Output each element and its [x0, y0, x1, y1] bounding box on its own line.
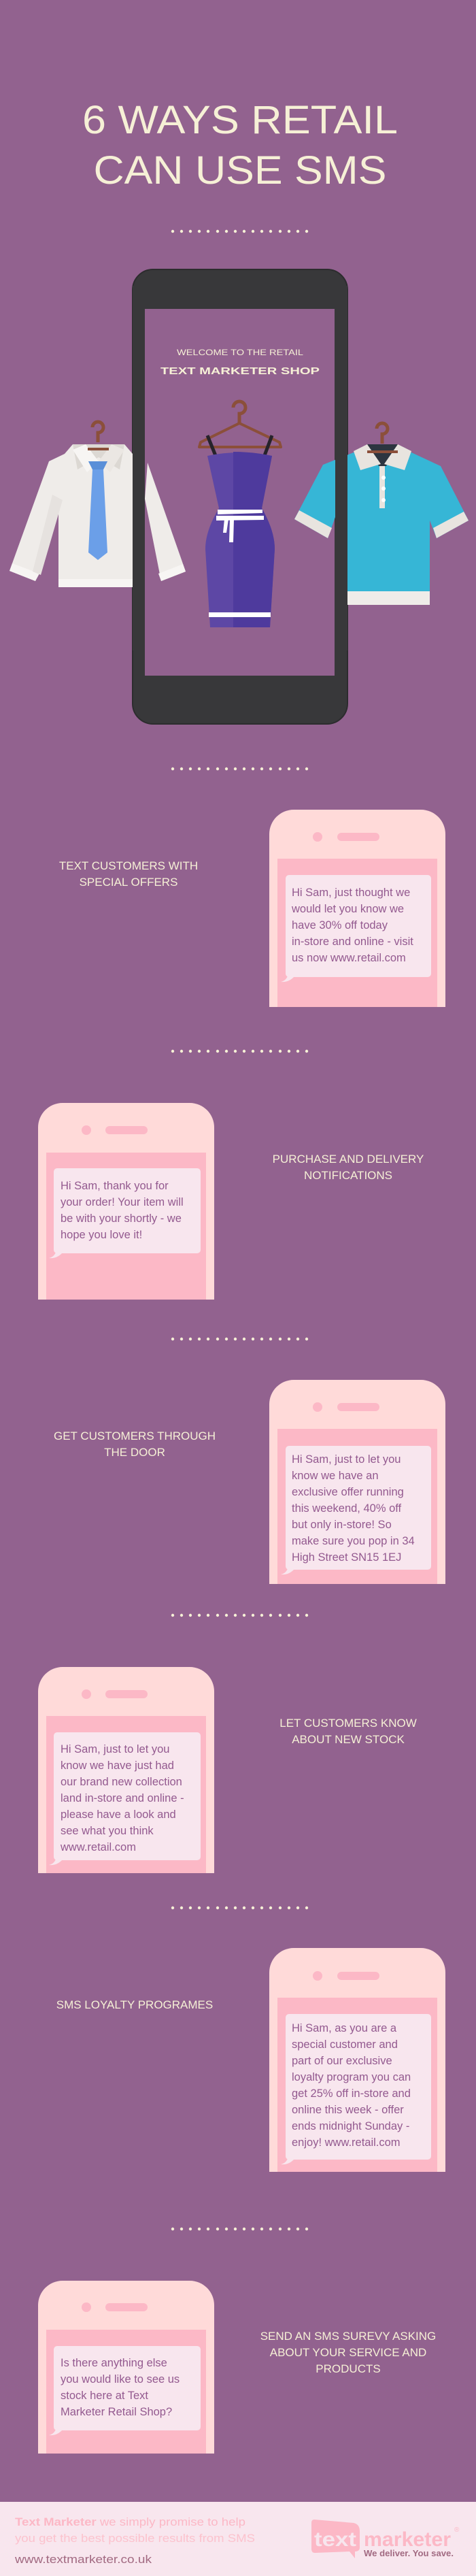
phone: survey sms: Marketer Retail Shop? — [61, 2406, 172, 2418]
phone: in-store offer sms — [269, 1380, 445, 1584]
phone: special offer sms: would let you know we — [291, 903, 404, 915]
phone: new collection sms: www.retail.com — [60, 1841, 136, 1853]
heading: send an sms survey: SEND AN SMS SUREVY ASKING — [260, 2330, 436, 2343]
hero: phone with clothes — [10, 269, 469, 724]
phone: loyalty sms: special customer and — [292, 2038, 398, 2051]
heading: purchase and delivery notifications: PURCHASE AND DELIVERY — [273, 1153, 424, 1166]
icon: white shirt with tie — [10, 286, 186, 650]
logo: text marketer: ® — [454, 2526, 460, 2534]
heading: let customers know about new stock: ABOUT NEW STOCK — [292, 1733, 405, 1746]
phone: order sms: your order! Your item will — [61, 1196, 184, 1208]
phone: in-store offer sms: make sure you pop in 34 — [292, 1535, 415, 1547]
phone: survey sms: Is there anything else — [61, 2357, 167, 2369]
phone: in-store offer sms: Hi Sam, just to let you — [292, 1453, 401, 1466]
phone: order sms: be with your shortly - we — [61, 1212, 182, 1225]
phone: new collection sms: know we have just had — [61, 1760, 174, 1772]
section 2: purchase notifications — [38, 1103, 424, 1300]
section 6: survey — [38, 2281, 436, 2454]
logo: text marketer: text — [314, 2528, 356, 2551]
footer — [0, 2502, 476, 2576]
heading: text customers with special offers: SPECIAL OFFERS — [80, 876, 177, 889]
phone: new collection sms: Hi Sam, just to let you — [61, 1743, 169, 1755]
phone: in-store offer sms: exclusive offer running — [292, 1486, 404, 1498]
logo: text marketer: We deliver. You save. — [364, 2548, 454, 2558]
phone: in-store offer sms: this weekend, 40% off — [292, 1502, 402, 1515]
shop welcome text — [160, 348, 320, 377]
section 5: loyalty — [56, 1948, 445, 2172]
heading: send an sms survey: ABOUT YOUR SERVICE AND — [270, 2346, 426, 2359]
phone: in-store offer sms: know we have an — [292, 1470, 378, 1482]
logo: text marketer: marketer — [364, 2528, 451, 2551]
title — [82, 98, 398, 193]
phone: loyalty sms: part of our exclusive — [292, 2055, 392, 2067]
footer text: you get the best possible results from SMS — [15, 2532, 255, 2545]
title: CAN USE SMS — [94, 148, 386, 193]
phone device — [133, 269, 347, 724]
phone: loyalty sms: get 25% off in-store and — [292, 2087, 411, 2100]
footer text — [14, 2515, 255, 2566]
logo: text marketer — [311, 2520, 460, 2558]
phone: special offer sms: Hi Sam, just thought we — [292, 887, 410, 899]
heading: get customers through the door — [54, 1430, 216, 1459]
phone: special offer sms: in-store and online - visit — [292, 936, 413, 948]
phone: loyalty sms: online this week - offer — [292, 2104, 404, 2116]
section 4: new stock — [38, 1667, 417, 1873]
phone: new collection sms: please have a look and — [61, 1809, 176, 1821]
phone: in-store offer sms: High Street SN15 1EJ — [292, 1551, 401, 1564]
icon: purple dress on hanger — [199, 401, 281, 627]
title: 6 WAYS RETAIL — [82, 98, 398, 142]
heading: get customers through the door: GET CUSTOMERS THROUGH — [54, 1430, 216, 1442]
phone: new collection sms: our brand new collection — [61, 1776, 182, 1788]
section 3: through the door — [54, 1380, 445, 1584]
phone: loyalty sms — [269, 1948, 445, 2172]
heading: let customers know about new stock: LET CUSTOMERS KNOW — [279, 1717, 417, 1730]
heading: send an sms survey — [260, 2330, 436, 2375]
footer text: Text Marketer we simply promise to help — [15, 2515, 245, 2528]
heading: purchase and delivery notifications: NOTIFICATIONS — [304, 1169, 392, 1182]
phone: new collection sms — [38, 1667, 214, 1873]
phone: special offer sms: have 30% off today — [292, 919, 388, 931]
shop welcome text: TEXT MARKETER SHOP — [160, 365, 320, 377]
section 1: special offers — [59, 810, 445, 1007]
phone: loyalty sms: Hi Sam, as you are a — [292, 2022, 397, 2034]
heading: text customers with special offers: TEXT CUSTOMERS WITH — [59, 859, 198, 872]
phone: survey sms: you would like to see us — [61, 2373, 180, 2385]
heading: get customers through the door: THE DOOR — [104, 1446, 165, 1459]
heading: send an sms survey: PRODUCTS — [316, 2362, 381, 2375]
phone: loyalty sms: loyalty program you can — [292, 2071, 411, 2083]
heading: text customers with special offers — [59, 859, 198, 889]
phone: order sms — [38, 1103, 214, 1300]
phone: special offer sms: us now www.retail.com — [292, 952, 406, 964]
footer text: www.textmarketer.co.uk — [14, 2553, 152, 2566]
phone: new collection sms: land in-store and online - — [61, 1792, 184, 1804]
icon: blue polo shirt — [294, 286, 469, 650]
phone: order sms: hope you love it! — [61, 1229, 142, 1241]
phone: loyalty sms: enjoy! www.retail.com — [292, 2136, 401, 2149]
heading: purchase and delivery notifications — [273, 1153, 424, 1182]
heading: sms loyalty programes: SMS LOYALTY PROGRAMES — [56, 1998, 213, 2011]
phone: loyalty sms: ends midnight Sunday - — [292, 2120, 409, 2132]
phone: in-store offer sms: but only in-store! So — [292, 1519, 392, 1531]
phone: special offer sms — [269, 810, 445, 1007]
phone: survey sms: stock here at Text — [61, 2390, 148, 2402]
phone: new collection sms: see what you think — [61, 1825, 154, 1837]
phone: survey sms — [38, 2281, 214, 2454]
heading: let customers know about new stock — [279, 1717, 417, 1746]
shop welcome text: WELCOME TO THE RETAIL — [177, 348, 303, 357]
phone: order sms: Hi Sam, thank you for — [61, 1180, 169, 1192]
